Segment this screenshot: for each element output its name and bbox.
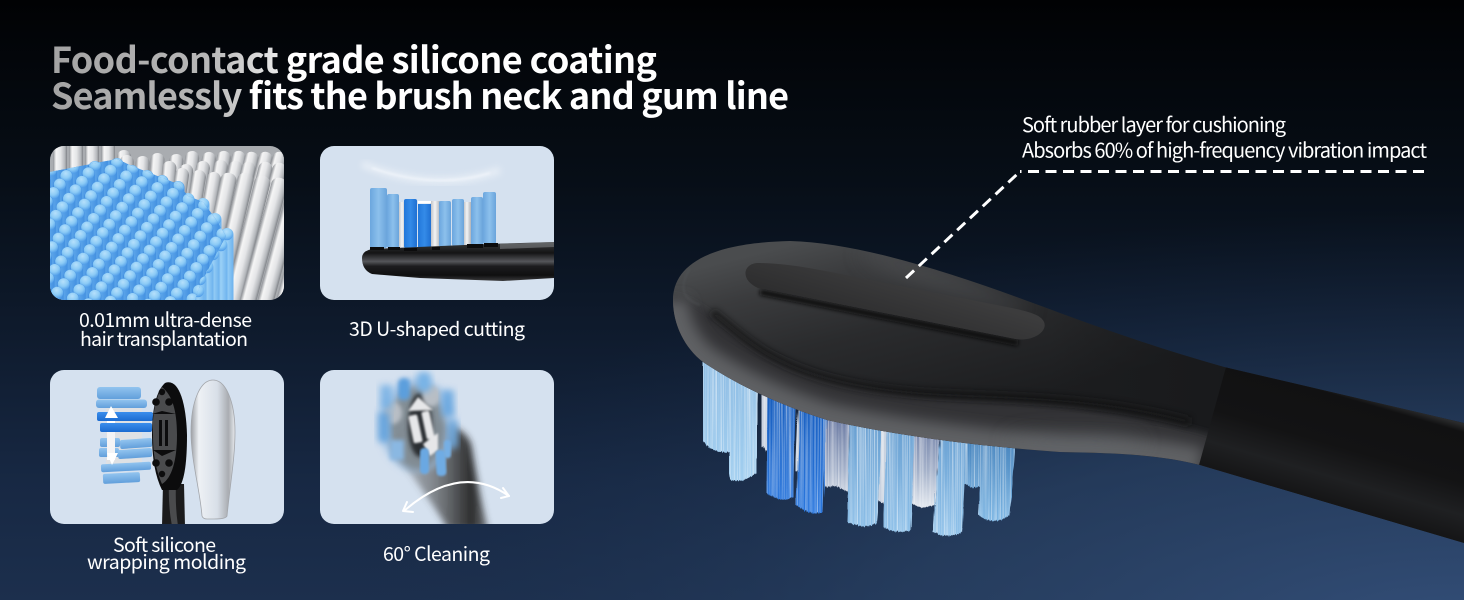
callout leader line [906, 172, 1424, 278]
arrow: rotation arc [403, 482, 509, 512]
callout text: Absorbs 60% of high-frequency vibration impact [1022, 134, 1427, 164]
blue tufts [50, 159, 226, 300]
soft rubber pad [745, 263, 1045, 343]
caption: 0.01mm ultra-dense [79, 304, 252, 333]
caption: wrapping molding [87, 546, 246, 575]
title: Seamlessly fits the brush neck and gum line [51, 68, 789, 120]
callout text [1022, 109, 1427, 164]
title [51, 32, 789, 120]
panel: 3D U-shaped cutting [320, 146, 554, 342]
panel: 60 degree cleaning [320, 370, 554, 567]
caption: 3D U-shaped cutting [349, 313, 525, 342]
bristle base [106, 405, 142, 465]
groove [712, 312, 1190, 422]
panel: soft silicone wrapping molding [50, 370, 284, 575]
blue edge tufts [89, 158, 234, 300]
caption: Soft silicone [113, 529, 216, 558]
head body [660, 230, 1464, 560]
rim highlight band [671, 300, 1200, 465]
caption [87, 529, 246, 575]
caption [79, 304, 252, 352]
image: brush in motion [320, 370, 554, 530]
white centre pieces [408, 397, 438, 456]
transparent silicone shell [191, 380, 235, 519]
image: exploded view of brush head [50, 370, 284, 526]
black plate and neck [152, 382, 187, 526]
bristles [702, 352, 1016, 536]
title: Food-contact grade silicone coating [51, 32, 657, 84]
lower rim [693, 306, 1208, 464]
image: side view of brush head [320, 146, 554, 300]
callout text: Soft rubber layer for cushioning [1022, 109, 1286, 138]
caption: 60° Cleaning [383, 538, 490, 567]
panel: ultra-dense hair transplantation [50, 146, 284, 350]
horizontal bristle tufts [96, 387, 153, 484]
image: dense blue and white bristles [50, 146, 284, 300]
caption: hair transplantation [80, 323, 248, 352]
main brush head [660, 230, 1464, 560]
neck section [1199, 367, 1464, 543]
highlight [878, 256, 1018, 308]
